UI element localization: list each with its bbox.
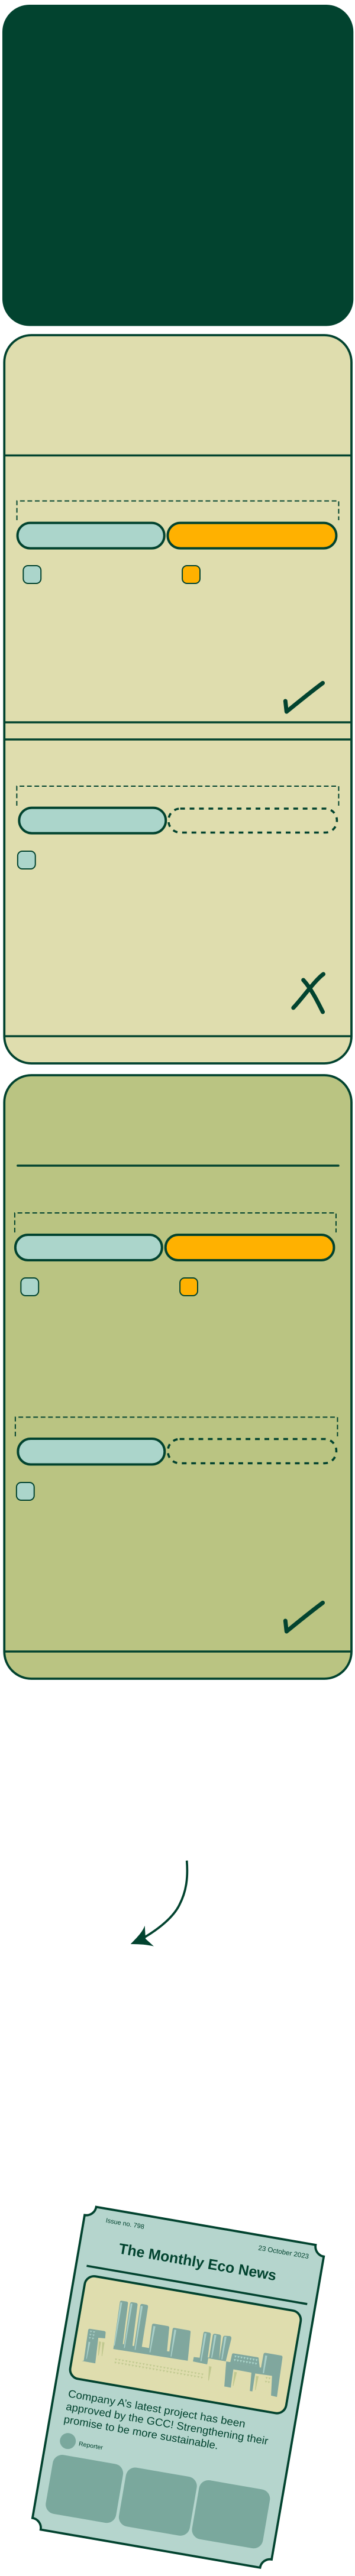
scenario 4 stacked bar (15, 1417, 337, 1465)
icon: check mark (285, 1603, 323, 1631)
scenario 2 legend key: mint (18, 851, 36, 869)
panel: beige section (4, 335, 351, 1063)
related article card 3 (191, 2478, 272, 2550)
scenario 3 legend key: orange (180, 1278, 198, 1296)
control panel triangles (233, 2356, 259, 2367)
scenario 3 stacked bar (15, 1213, 336, 1260)
scenario 1 stacked bar (17, 501, 338, 549)
date: 23 October 2023 (257, 2244, 309, 2260)
right factory block (222, 2347, 284, 2397)
scenario 1 legend key: mint (23, 566, 41, 583)
scenario 4 legend key: mint (17, 1482, 34, 1500)
header panel (2, 5, 353, 326)
panel: green section (4, 1075, 351, 1679)
related article card 2 (117, 2466, 198, 2537)
large factory left block (112, 2300, 196, 2362)
article text: approved by the GCC! Strengthening their (65, 2400, 269, 2447)
issue number: Issue no. 798 (105, 2217, 145, 2231)
article text: promise to be more sustainable. (63, 2413, 220, 2452)
icon: cross mark (293, 974, 324, 1012)
reporter avatar (59, 2432, 77, 2450)
scenario 2 stacked bar (17, 786, 338, 833)
central towers (193, 2331, 232, 2368)
scenario 3 legend key: mint (21, 1278, 38, 1296)
newspaper title: The Monthly Eco News (118, 2240, 277, 2284)
scenario 1 legend key: orange (182, 566, 200, 583)
reporter label: Reporter (78, 2441, 104, 2451)
article text (63, 2387, 272, 2460)
article text: Company A’s latest project has been (67, 2387, 246, 2430)
newspaper picture: factory (69, 2275, 302, 2415)
arrow (131, 1861, 187, 1946)
icon: check mark (285, 683, 323, 712)
triangle rows (114, 2358, 205, 2380)
related article card 1 (44, 2454, 125, 2525)
small building (82, 2328, 106, 2364)
newspaper (31, 2205, 325, 2569)
green tapered marks (206, 2366, 259, 2390)
